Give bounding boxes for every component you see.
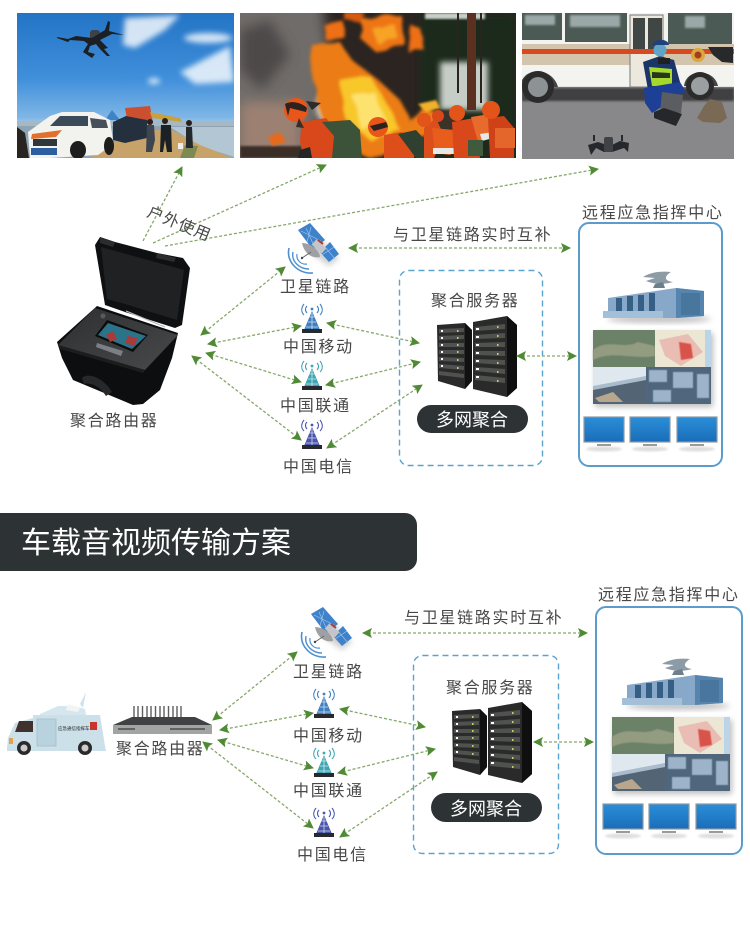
icon: China Telecom tower xyxy=(314,808,334,837)
arrow: satellite to command centre xyxy=(349,247,570,249)
panel: aggregation server xyxy=(400,270,542,466)
icon: China Mobile tower xyxy=(314,689,334,718)
arrow: server to command centre xyxy=(534,741,593,743)
label: complements satellite link: 与卫星链路实时互补 xyxy=(404,609,563,627)
label: aggregation server: 聚合服务器 xyxy=(431,292,520,310)
label: China Telecom: 中国电信 xyxy=(297,846,368,864)
label: satellite link: 卫星链路 xyxy=(293,663,364,681)
label: aggregation router: 聚合路由器 xyxy=(116,740,205,758)
icon: China Unicom tower xyxy=(302,361,322,390)
panel: remote command centre xyxy=(579,223,722,466)
icon: servers xyxy=(452,702,532,783)
icon: satellite xyxy=(302,607,352,657)
panel: aggregation server xyxy=(414,656,558,854)
arrow: satellite to command centre xyxy=(363,632,587,634)
label: China Unicom: 中国联通 xyxy=(293,782,364,800)
photo: drone over lakeside vehicles xyxy=(17,13,234,159)
arrows: router to carriers xyxy=(203,652,313,828)
banner: vehicle audio-video solution xyxy=(0,513,417,571)
label: aggregation router: 聚合路由器 xyxy=(70,412,159,430)
icon: China Mobile tower xyxy=(302,304,322,333)
pill: multi-network aggregation xyxy=(431,793,542,822)
icon: servers xyxy=(437,316,517,397)
icon: command vehicle: 应急通信指挥车 xyxy=(58,725,90,732)
label: complements satellite link: 与卫星链路实时互补 xyxy=(393,226,552,244)
pill: multi-network aggregation xyxy=(417,405,528,433)
label: satellite link: 卫星链路 xyxy=(280,278,351,296)
label: aggregation server: 聚合服务器 xyxy=(446,679,535,697)
icon: China Unicom tower xyxy=(314,748,334,777)
text: outdoor use: 户外使用 xyxy=(145,203,214,245)
arrows: carriers to aggregation server xyxy=(326,323,422,448)
arrow: outdoor use to photo 1 xyxy=(143,167,182,241)
panel: remote command centre xyxy=(596,607,742,854)
label: remote command centre: 远程应急指挥中心 xyxy=(582,203,724,222)
label: China Mobile: 中国移动 xyxy=(283,338,354,356)
device: aggregation router in case xyxy=(57,237,190,405)
arrow: outdoor use to photo 3 xyxy=(165,169,598,246)
label: China Telecom: 中国电信 xyxy=(283,458,354,476)
arrows: carriers to aggregation server xyxy=(338,709,437,837)
label: China Unicom: 中国联通 xyxy=(280,397,351,415)
arrows: router to carriers xyxy=(192,267,301,440)
label: remote command centre: 远程应急指挥中心 xyxy=(598,585,740,604)
device: rack aggregation router xyxy=(113,706,212,734)
banner: vehicle audio-video solution: 车载音视频传输方案 xyxy=(21,527,291,560)
icon: satellite xyxy=(289,223,339,273)
icon: command vehicle xyxy=(7,692,106,755)
photo: firefighters in front of wildfire xyxy=(240,13,516,158)
pill: multi-network aggregation: 多网聚合 xyxy=(450,799,522,819)
pill: multi-network aggregation: 多网聚合 xyxy=(436,410,508,430)
arrow: outdoor use to photo 2 xyxy=(153,165,326,243)
arrow: server to command centre xyxy=(517,355,576,357)
label: China Mobile: 中国移动 xyxy=(293,727,364,745)
photo: rescue bus, operator and drone xyxy=(520,13,734,159)
icon: China Telecom tower xyxy=(302,420,322,449)
